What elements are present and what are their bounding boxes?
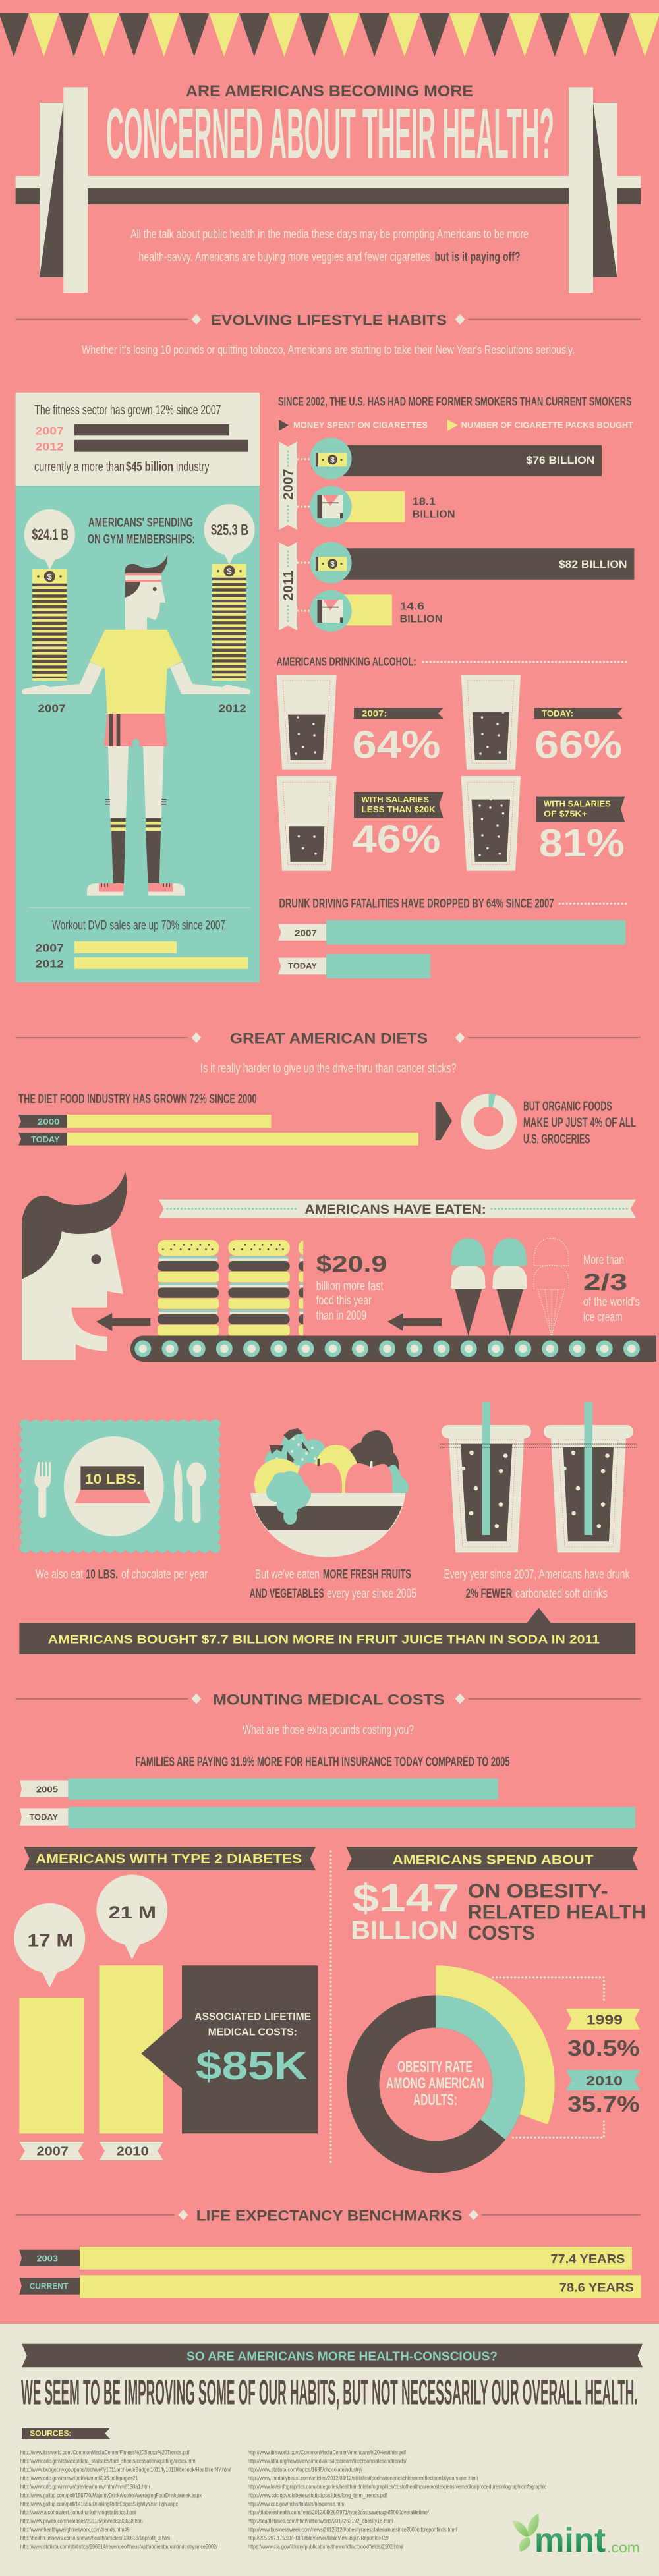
bubble: 2007 gym spending [24,509,75,570]
icon: glass 81% [461,776,521,871]
stat: obesity spending: $147 [352,1876,459,1920]
chart: diet food industry: TODAY [31,1134,60,1144]
chart: life expectancy: 2003 [37,2254,58,2264]
sources: left column: http://www.alcoholalert.com/drunkdrivingstatistics.html [20,2509,136,2517]
chart: drunk driving fatalities: 2007 [295,928,317,938]
sources: right column: https://www.cia.gov/library/publications/theworldfactbook/fields/2102.html [248,2544,403,2551]
caption: fruits and vegetables: But we've eaten [255,1568,320,1582]
sources: right column: http://www.loveinfographics.com/categories/healthanddietinfographics/costofhealthcaremostexpensivemedicalproceduresinfographicinfographic [248,2484,547,2491]
organic foods text [523,1100,636,1147]
banner: americans have eaten: AMERICANS HAVE EATEN: [304,1202,486,1217]
right broccoli [382,1465,409,1493]
stat: 2007 drinkers: 64% [352,723,440,767]
caption: soft drinks: 2% FEWER [466,1587,513,1601]
sources: right column: http://www.statista.com/topics/1638/chocolateindustry/ [248,2467,362,2474]
section intro: What are those extra pounds costing you? [243,1723,414,1737]
stat: ice cream [583,1254,640,1324]
icon: cash 2011: $ [330,559,335,569]
chart: diet food industry: 2000 [38,1117,60,1127]
sources: right column: http://seattletimes.com/html/nationworld/2017263192_obesity18.html [248,2518,393,2525]
workout dvd chart: Workout DVD sales are up 70% since 2007 [52,919,225,933]
caption: chocolate: of chocolate per year [121,1568,208,1582]
intro text: but is it paying off? [435,250,521,264]
arrow: to organic foods [436,1102,452,1140]
ribbon: sources [22,2428,110,2439]
chart: cigarettes 2011 [279,542,634,632]
callout: lifetime medical costs: MEDICAL COSTS: [208,2027,297,2038]
icon: coin stack 2012: $ [227,567,232,576]
ribbon: type 2 diabetes: AMERICANS WITH TYPE 2 DIABETES [36,1851,302,1866]
stat: obesity 2010 [566,2070,640,2116]
bar: packs 2011 [343,594,443,625]
icon: pack 2011 [310,590,352,632]
gym heading: AMERICANS' SPENDING [88,515,193,530]
chart: drunk driving fatalities: TODAY [288,961,317,970]
icon: burger stacks [158,1240,303,1336]
stat: ice cream: ice cream [583,1310,622,1324]
cone 1 [451,1238,486,1336]
bar: packs 2011: 14.6 [399,601,424,612]
panel: fitness sector: currently a more than [34,460,125,474]
section heading: great american diets: GREAT AMERICAN DIETS [230,1030,428,1047]
caption: soft drinks [444,1568,630,1601]
bowl [250,1493,405,1557]
section heading: mounting medical costs: MOUNTING MEDICAL COSTS [213,1692,445,1708]
caption: fruits and vegetables [250,1568,416,1601]
arrow: into mouth [96,1313,150,1331]
chart: life expectancy [19,2247,641,2298]
bubble: 17 M [14,1903,85,1988]
stat: fast food: $20.9 [316,1252,387,1277]
panel: fitness sector [16,393,260,486]
sources: right column: http://www.ibisworld.com/CommonMediaCenter/Americans%20Healthier.pdf [248,2450,406,2457]
bar: money 2011 [343,548,634,580]
stat: fast food [316,1252,387,1323]
year labels [38,704,246,715]
ribbon: sources: SOURCES: [30,2430,71,2438]
chart: diabetes bars [14,1875,167,2160]
logo: mint.com: .com [607,2540,640,2556]
icon: fruit bowl [250,1428,409,1557]
pennant banner [0,13,659,57]
ribbon: americans spend about: AMERICANS SPEND ABOUT [393,1852,594,1867]
panel: fitness sector: industry [176,460,210,474]
stat: ice cream: 2/3 [583,1270,627,1295]
icon: glass 66% [461,675,521,770]
sources: left column: http://www.budget.ny.gov/pubs/archive/fy1011archive/eBudget1011/fy1011littlebook/HealthierNY.html [20,2467,231,2474]
section heading: great american diets [16,1030,641,1047]
caption: chocolate: We also eat [36,1568,84,1582]
sources: right column: http://www.idfa.org/newsviews/mediakits/icecream/icecreamsalesandtrends/ [248,2458,407,2465]
icon: cash 2007 [310,437,352,480]
workout dvd chart [36,919,248,970]
stat: 2007 drinkers [352,708,444,767]
sources: right column: http://www.businessweek.com/news/20120120/obesityratesplateauinussince2000cdcreportfinds.html [248,2527,457,2534]
stat: fast food: food this year [316,1294,372,1308]
ribbon: 2011 [279,542,297,630]
stat: obesity 2010: 35.7% [567,2092,640,2116]
conveyor belt [130,1336,656,1362]
stat: obesity 1999: 30.5% [567,2036,640,2060]
chart: health insurance: TODAY [30,1812,58,1822]
stat: high salaries: 81% [539,822,625,865]
stat: obesity spending: COSTS [468,1922,535,1944]
bars [19,1965,163,2133]
banner: americans have eaten [159,1200,636,1218]
logo: mint.com [512,2513,640,2560]
callout: fruit juice: AMERICANS BOUGHT $7.7 BILLION MORE IN FRUIT JUICE THAN IN SODA IN 2011 [48,1632,600,1646]
sources: left column: http://www.ibisworld.com/CommonMediaCenter/Fitness%20Sector%20Trends.pdf [20,2450,190,2457]
apples [296,1463,342,1493]
caption: fruits and vegetables: MORE FRESH FRUITS [323,1568,411,1582]
sources: right column: http://www.thedailybeast.com/articles/2012/03/12/stillafastfoodnationericschlosserreflectson10yearslater.html [248,2475,478,2482]
callout: lifetime medical costs [141,1965,318,2133]
stat: obesity 1999: 1999 [587,2012,623,2028]
icon: coin stack 2012 [212,564,246,681]
section heading: evolving lifestyle habits [16,312,641,328]
bubble: 21 M [96,1875,167,1959]
yellow fruits [254,1459,304,1509]
callout: lifetime medical costs: $85K [196,2044,308,2088]
divider dots [330,1851,332,2162]
sources: right column: http://www.cdc.gov/diabetes/statistics/slides/long_term_trends.pdf [248,2492,387,2500]
donut label: AMONG AMERICAN [386,2075,484,2092]
donut label: OBESITY RATE [397,2058,473,2076]
section intro: Is it really harder to give up the drive-thru than cancer sticks? [200,1062,457,1075]
stat: fast food: than in 2009 [316,1309,366,1323]
chart: cigarettes 2007 [279,437,602,530]
chart: life expectancy: CURRENT [30,2281,68,2291]
chart: life expectancy: 78.6 YEARS [559,2282,634,2295]
ribbon: type 2 diabetes [24,1847,316,1870]
section heading: evolving lifestyle habits: EVOLVING LIFESTYLE HABITS [211,312,447,328]
bar: money 2011: $82 BILLION [559,559,627,571]
stat: low salaries [352,792,444,861]
bar: packs 2007: 18.1 [413,497,436,508]
sources: right column: http://205.207.175.93/HDI/TableViewer/tableView.aspx?ReportId=169 [248,2535,389,2542]
stat: today drinkers [534,708,623,767]
stat: low salaries: WITH SALARIES [361,795,429,804]
caption: chocolate: 10 LBS. [86,1568,118,1582]
caption: chocolate [36,1568,208,1582]
ribbon: 2010 [99,2142,163,2160]
section heading: life expectancy benchmarks: LIFE EXPECTANCY BENCHMARKS [196,2208,463,2224]
sources: left column: http://www.healthyweightnetwork.com/trends.htm#9 [20,2527,130,2534]
cup 2 [544,1402,633,1552]
icon: coin stack 2007: $ [47,572,53,582]
donut label [386,2058,484,2109]
year labels: 2012 [219,704,246,715]
stat: high salaries [536,797,625,865]
chart: health insurance [20,1755,635,1828]
sources: right column: http://www.cdc.gov/nchs/fastats/hexpense.htm [248,2501,344,2508]
sources: left column: http://www.gallup.com/poll/141656/DrinkingRateEdgesSlightlyYearHigh.aspx [20,2501,178,2508]
gym heading: ON GYM MEMBERSHIPS: [88,532,195,546]
panel: fitness sector: The fitness sector has grown 12% since 2007 [34,403,221,418]
bubble: 17 M: 17 M [28,1931,74,1951]
stat: obesity spending [351,1876,646,1945]
ribbon: 2007 [279,441,297,530]
chart: obesity rate donut [363,1965,604,2157]
stat: low salaries: 46% [352,818,440,861]
gym heading [88,515,195,546]
front broccoli [266,1471,311,1525]
intro text [130,228,529,264]
legend: cigarettes [279,420,633,431]
sources: right column: http://diabeteshealth.com/read/2013/08/26/7971/type2costsaverage85000overalifetime/ [248,2509,429,2517]
bubble: 2012 gym spending [204,504,255,565]
sources: left column: http://www.cdc.gov/mmwr/pdf/wk/mm6035.pdf#page=21 [20,2475,138,2482]
bubble: 21 M: 21 M [108,1903,156,1922]
stat: high salaries: WITH SALARIES [544,799,611,809]
ribbon: 2007 [19,2142,84,2160]
icon: chocolate placemat: 10 LBS. [85,1471,141,1487]
chart: diet food industry: THE DIET FOOD INDUSTRY HAS GROWN 72% SINCE 2000 [18,1092,257,1106]
panel: fitness sector: 2007 [36,425,64,437]
dark fruit [347,1430,399,1493]
callout: fruit juice [19,1608,635,1654]
heading: drinking alcohol: AMERICANS DRINKING ALCOHOL: [277,656,416,669]
bar: packs 2011: BILLION [399,613,443,625]
ribbon: americans spend about [347,1847,638,1870]
stat: low salaries: LESS THAN $20K [361,804,436,814]
panel: fitness sector: $45 billion [126,460,173,474]
stat: fast food: billion more fast [316,1279,384,1293]
icon: chocolate placemat [22,1422,218,1551]
sources: left column: http://www.cdc.gov/tobacco/data_statistics/fact_sheets/cessation/quitting/index.htm [20,2458,196,2465]
chart: organic share donut [467,1094,510,1143]
figure: big head [22,1172,127,1360]
strawberries [265,1428,326,1476]
caption: fruits and vegetables: AND VEGETABLES [250,1587,324,1601]
arrow: ice cream to burgers [387,1313,442,1331]
donut label: ADULTS: [413,2091,457,2109]
bar: packs 2007: BILLION [413,509,455,520]
stat: obesity spending: BILLION [351,1917,458,1945]
sources: left column [20,2450,231,2551]
icon: glass 64% [277,675,337,770]
cone 2 [492,1238,527,1336]
stat: today drinkers: 66% [534,723,622,767]
intro text: health-savvy. Americans are buying more veggies and fewer cigarettes, [138,250,433,264]
icon: coin stack 2007 [32,569,67,681]
ribbon: so are americans more health-conscious [22,2344,643,2367]
ribbon: 2007: 2007 [281,469,296,500]
intro text: All the talk about public health in the media these days may be prompting Americans to be more [130,228,529,241]
legend: cigarettes: MONEY SPENT ON CIGARETTES [293,420,428,430]
stat: today drinkers: TODAY: [542,709,573,718]
ribbon: 2007: 2007 [37,2145,69,2158]
icon: pack 2007 [310,486,352,528]
stat: 2007 drinkers: 2007: [362,709,387,718]
ribbon: 2011: 2011 [281,571,296,601]
stat: obesity 2010: 2010 [586,2073,623,2088]
icon: cash 2007: $ [330,455,335,464]
stat: ice cream: of the world's [583,1295,640,1309]
stat: obesity spending: RELATED HEALTH [468,1901,646,1924]
icon: ice cream cones [451,1238,569,1336]
stat: obesity spending: ON OBESITY- [468,1880,608,1902]
title: ARE AMERICANS BECOMING MORE [186,82,473,100]
bubble: 2007 gym spending: $24.1 B [32,526,69,543]
bar: packs 2007 [343,491,455,522]
barbell [16,87,641,293]
cone 3 outline [534,1238,569,1336]
chart: drunk driving fatalities [278,897,626,978]
workout dvd chart: 2007 [36,943,64,955]
figure: athlete [22,555,250,896]
sources: left column: http://www.statista.com/statistics/196614/revenueoftheusfastfoodrestaurantindustrysince2002/ [20,2544,217,2551]
sources: left column: http://health.usnews.com/usnews/health/articles/030616/16profit_3.htm [20,2535,170,2542]
sources: left column: http://www.gallup.com/poll/156770/MajorityDrinkAlcoholAveragingFourDrinksWeek.aspx [20,2492,202,2500]
panel: fitness sector: 2012 [36,441,64,453]
bubble: 2012 gym spending: $25.3 B [211,521,248,538]
sources: left column: http://www.cdc.gov/mmwr/preview/mmwrhtml/mm6130a1.htm [20,2484,150,2491]
icon: glass 46% [277,776,337,871]
panel: footer [0,2324,659,2576]
stat: obesity 1999 [566,2009,640,2060]
chart: health insurance: 2005 [36,1785,58,1795]
panel: gym memberships [16,486,260,982]
caption: fruits and vegetables: every year since 2005 [327,1587,416,1601]
organic foods text: U.S. GROCERIES [523,1133,590,1147]
logo: mint.com: mint [534,2521,606,2560]
chart: life expectancy: 77.4 YEARS [551,2253,625,2266]
legend: cigarettes: NUMBER OF CIGARETTE PACKS BOUGHT [461,420,633,430]
bar: money 2007: $76 BILLION [526,455,594,466]
ribbon: so are americans more health-conscious: SO ARE AMERICANS MORE HEALTH-CONSCIOUS? [186,2350,498,2363]
year labels: 2007 [38,704,66,715]
stat: ice cream: More than [583,1254,624,1268]
icon: soda cups [440,1402,637,1552]
section heading: life expectancy benchmarks [16,2208,641,2224]
chart: diet food industry [18,1092,418,1146]
callout: lifetime medical costs: ASSOCIATED LIFETIME [194,2011,311,2023]
bar: money 2007 [343,445,602,476]
sources: right column [248,2450,547,2551]
sources: left column: http://www.prweb.com/releases/2011/5/prweb8393658.htm [20,2518,143,2525]
stat: high salaries: OF $75K+ [544,809,587,819]
ribbon: 2010: 2010 [117,2145,149,2158]
caption: soft drinks: carbonated soft drinks [515,1587,608,1601]
section heading: mounting medical costs [16,1692,641,1708]
workout dvd chart: 2012 [36,959,64,970]
icon: cash 2011 [310,542,352,584]
cup 1 [442,1402,531,1552]
